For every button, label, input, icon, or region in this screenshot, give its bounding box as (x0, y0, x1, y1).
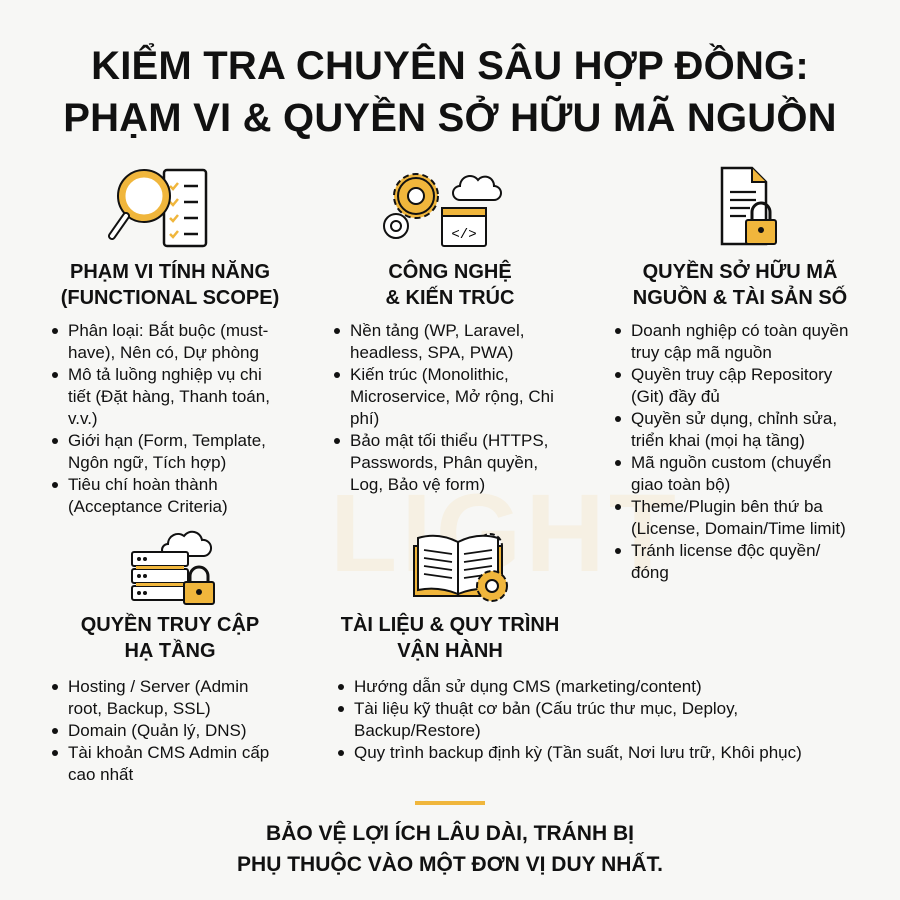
list: source ownership: Theme/Plugin bên thứ ba (631, 497, 823, 516)
list: docs: Tài liệu kỹ thuật cơ bản (Cấu trúc thư mục, Deploy, (354, 699, 738, 718)
list: infrastructure: Tài khoản CMS Admin cấp (68, 743, 269, 762)
list: source ownership: (Git) đầy đủ (631, 387, 720, 406)
list: functional scope: Tiêu chí hoàn thành (Acceptance Criteria) (68, 475, 228, 516)
list: infrastructure: root, Backup, SSL) (68, 699, 211, 718)
footer message (237, 820, 663, 876)
list: tech: Log, Bảo vệ form) (350, 475, 485, 494)
list: functional scope (52, 321, 270, 516)
list: source ownership: đóng (631, 563, 669, 582)
list: source ownership: Tránh license độc quyền/ (631, 541, 820, 560)
list: functional scope: Mô tả luồng nghiệp vụ chi (68, 365, 262, 384)
list: source ownership: giao toàn bộ) (631, 475, 730, 494)
list: tech: Nền tảng (WP, Laravel, (350, 321, 524, 340)
heading: functional scope (61, 260, 279, 309)
list: source ownership: truy cập mã nguồn (631, 343, 772, 362)
heading: tech: & KIẾN TRÚC (386, 287, 514, 309)
list: docs: Hướng dẫn sử dụng CMS (marketing/content) (354, 677, 702, 696)
icon: book gears (413, 533, 508, 602)
icon: servers lock (131, 530, 215, 605)
list: infrastructure: cao nhất (68, 765, 133, 784)
heading: functional scope: PHẠM VI TÍNH NĂNG (70, 261, 270, 283)
list: source ownership (615, 321, 848, 582)
footer message: PHỤ THUỘC VÀO MỘT ĐƠN VỊ DUY NHẤT. (237, 853, 663, 876)
list: tech (334, 321, 554, 494)
heading: docs: TÀI LIỆU & QUY TRÌNH (341, 614, 559, 636)
heading: infrastructure (81, 612, 259, 662)
list: functional scope: Giới hạn (Form, Template, Ngôn ngữ, Tích hợp) (68, 431, 266, 472)
footer message: BẢO VỆ LỢI ÍCH LÂU DÀI, TRÁNH BỊ (266, 822, 634, 845)
list: docs: Quy trình backup định kỳ (Tần suất, Nơi lưu trữ, Khôi phục) (354, 743, 802, 762)
icon: document lock (720, 166, 777, 246)
list: tech: Kiến trúc (Monolithic, (350, 365, 509, 384)
heading: source ownership: QUYỀN SỞ HỮU MÃ (643, 261, 837, 283)
title: PHẠM VI & QUYỀN SỞ HỮU MÃ NGUỒN (63, 96, 837, 140)
watermark: LIGHT (330, 472, 680, 595)
list: docs: Backup/Restore) (354, 721, 481, 740)
list: source ownership: triển khai (mọi hạ tầng) (631, 431, 805, 450)
heading: infrastructure: HẠ TẦNG (124, 640, 216, 662)
heading: tech: CÔNG NGHỆ (388, 261, 512, 283)
list: infrastructure: Hosting / Server (Admin (68, 677, 248, 696)
list: source ownership: Doanh nghiệp có toàn quyền (631, 321, 848, 340)
list: docs (338, 677, 802, 762)
list: source ownership: Quyền sử dụng, chỉnh sửa, (631, 409, 837, 428)
heading: tech (386, 260, 514, 309)
icon: magnifier checklist (108, 168, 208, 248)
heading: docs: VẬN HÀNH (397, 640, 503, 662)
list: infrastructure: Domain (Quản lý, DNS) (68, 721, 247, 740)
list: tech: Microservice, Mở rộng, Chi (350, 387, 554, 406)
heading: source ownership: NGUỒN & TÀI SẢN SỐ (633, 287, 847, 309)
heading: docs (340, 612, 559, 662)
list: source ownership: (License, Domain/Time limit) (631, 519, 846, 538)
list: tech: Bảo mật tối thiểu (HTTPS, (350, 431, 548, 450)
list: tech: phí) (350, 409, 379, 428)
list: functional scope: Phân loại: Bắt buộc (must-have), Nên có, Dự phòng (68, 321, 268, 362)
heading: infrastructure: QUYỀN TRUY CẬP (81, 614, 259, 636)
list: infrastructure (52, 677, 269, 784)
list: functional scope: tiết (Đặt hàng, Thanh toán, v.v.) (68, 387, 270, 428)
title: KIỂM TRA CHUYÊN SÂU HỢP ĐỒNG: (91, 44, 809, 88)
icon: gears cloud code (383, 173, 502, 247)
list: tech: Passwords, Phân quyền, (350, 453, 538, 472)
icon: gears cloud code: </> (451, 227, 477, 243)
heading: source ownership (633, 260, 847, 309)
heading: functional scope: (FUNCTIONAL SCOPE) (61, 287, 279, 309)
list: source ownership: Quyền truy cập Repository (631, 365, 832, 384)
title (63, 43, 837, 140)
list: source ownership: Mã nguồn custom (chuyển (631, 453, 831, 472)
list: tech: headless, SPA, PWA) (350, 343, 513, 362)
